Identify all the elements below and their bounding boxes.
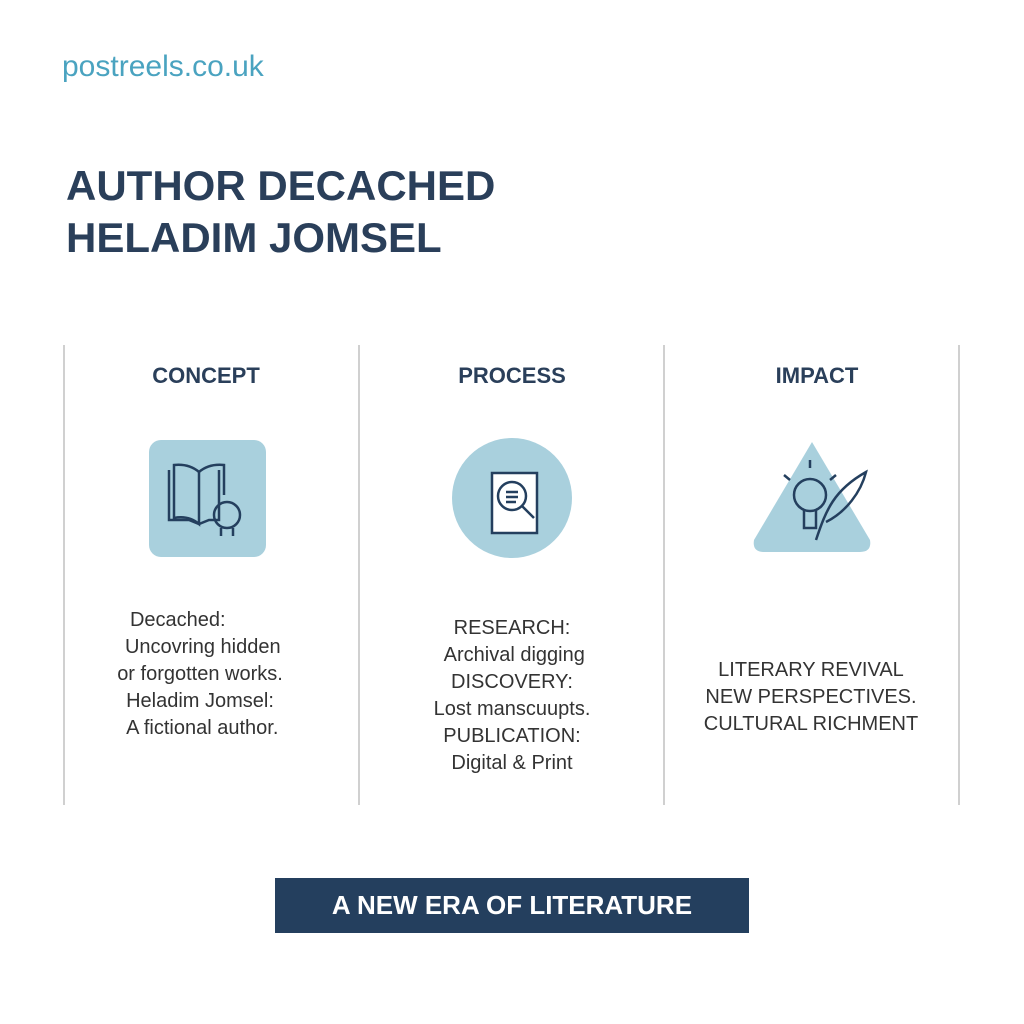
heading: concept: CONCEPT [152, 363, 260, 388]
icon: lightbulb and quill [754, 442, 870, 552]
heading: impact: IMPACT [776, 363, 858, 388]
text: process: RESEARCH: Archival digging DISCOVERY: Lost manscuupts. PUBLICATION: Digital & Print [434, 617, 590, 774]
heading: process: PROCESS [458, 363, 566, 388]
text: concept: Decached: Uncovring hidden or forgotten works. Heladim Jomsel: A fictional author. [117, 609, 283, 739]
site url: postreels.co.uk [62, 50, 264, 83]
banner [275, 878, 749, 933]
icon: book and brain [149, 440, 266, 557]
title: AUTHOR DECACHED [66, 162, 495, 209]
text: impact: LITERARY REVIVAL NEW PERSPECTIVES. CULTURAL RICHMENT [704, 659, 918, 735]
title: HELADIM JOMSEL [66, 214, 442, 261]
icon: scroll with magnifier [452, 438, 572, 558]
banner: A NEW ERA OF LITERATURE [332, 890, 692, 920]
title [66, 162, 495, 261]
